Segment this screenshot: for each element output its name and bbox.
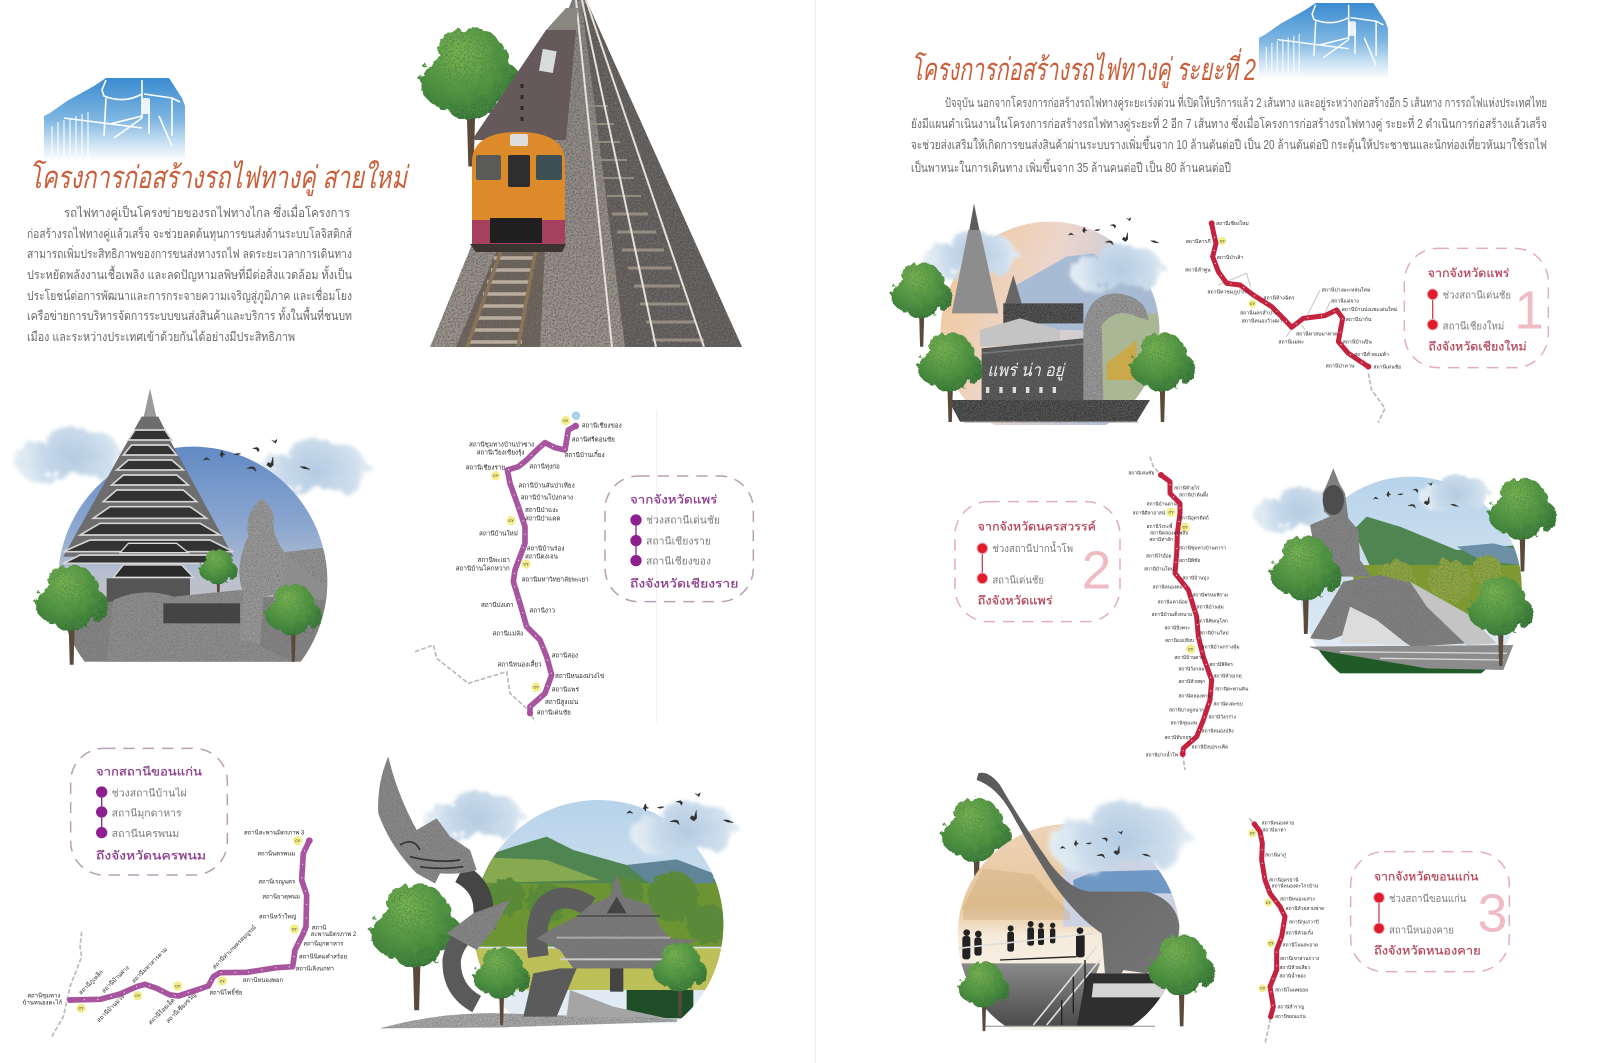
route map: Pak Nam Pho to Den Chai: สถานีวังกร่าง	[1208, 714, 1237, 721]
route map: Den Chai to Chiang Khong: สถานีป่าแงะ	[525, 506, 559, 514]
route map: Ban Phai to Nakhon Phanom: บ้านหนองตะไก้	[23, 999, 63, 1007]
route map: Pak Nam Pho to Den Chai: สถานีแม่เทียบ	[1165, 637, 1194, 644]
route map: Pak Nam Pho to Den Chai: สถานีหนองปลิง	[1202, 728, 1234, 735]
route map: Den Chai to Chiang Khong: CY	[508, 519, 514, 523]
route map: Ban Phai to Nakhon Phanom: สถานีภูเหล็ก	[76, 967, 105, 996]
route map: Pak Nam Pho to Den Chai: สถานีบ้านกร่างคุ้ม	[1202, 644, 1240, 651]
route map: Khon Kaen to Nong Khai: CY	[1260, 987, 1266, 991]
route map: Ban Phai to Nakhon Phanom: สถานีหว้าใหญ่	[259, 913, 296, 921]
route map: Khon Kaen to Nong Khai: สถานีกุมภวาปี	[1289, 918, 1319, 925]
legend 2: Nakhon Sawan to Phrae: ช่วงสถานีปากน้ำโพ	[992, 541, 1073, 555]
route map: Khon Kaen to Nong Khai: สถานีโนนพยอม	[1275, 986, 1308, 993]
route map: Pak Nam Pho to Den Chai: CY	[1188, 647, 1194, 651]
route map: Pak Nam Pho to Den Chai: สถานีห้วยเกตุ	[1213, 673, 1242, 680]
route map: Khon Kaen to Nong Khai: สถานีห้วยสามพาด	[1286, 905, 1324, 912]
route map: Pak Nam Pho to Den Chai	[1128, 457, 1249, 770]
text block: intro left: เครือข่ายการบริหารจัดการระบบขนส่งสินค้าและบริการ ทั้งในพื้นที่ชนบท	[27, 306, 352, 323]
text block: phase 2 intro: เป็นพาหนะในการเดินทาง เพิ่มขึ้นจาก 35 ล้านคนต่อปี เป็น 80 ล้านคนต่อปี	[911, 158, 1231, 175]
route map: Ban Phai to Nakhon Phanom: สถานีธาตุพนม	[262, 893, 300, 901]
route map: Den Chai to Chiang Khong: สถานีปงเตา	[481, 601, 514, 609]
route map: Ban Phai to Nakhon Phanom: สถานีโพธิ์ชัย	[209, 987, 242, 996]
legend: Phrae to Chiang Rai: สถานีเชียงราย	[646, 535, 711, 547]
route map: Pak Nam Pho to Den Chai: สถานีพิจิตร	[1209, 661, 1233, 668]
route map: Pak Nam Pho to Den Chai: สถานีห้วยพุก	[1178, 678, 1205, 685]
route map: Pak Nam Pho to Den Chai: สถานีวังกลม	[1178, 666, 1204, 673]
legend 3: Khon Kaen to Nong Khai: 3	[1478, 885, 1507, 944]
legend 3: Khon Kaen to Nong Khai: ช่วงสถานีขอนแก่น	[1389, 893, 1466, 905]
route map: Pak Nam Pho to Den Chai: สถานีห้วยไร่	[1174, 485, 1200, 492]
legend 3: Khon Kaen to Nong Khai	[1351, 852, 1509, 972]
legend: Phrae to Chiang Rai: สถานีเชียงของ	[646, 556, 711, 568]
route map: Pak Nam Pho to Den Chai: สถานีปากน้ำโพ	[1146, 750, 1178, 758]
picture: Phrae stupa and city wall	[891, 203, 1195, 425]
route map: Pak Nam Pho to Den Chai: สถานีบ้านสุม	[1197, 604, 1224, 611]
route map: Den Chai to Chiang Khong: CY	[493, 474, 499, 478]
route map: Pak Nam Pho to Den Chai: สถานีวังกะพี้	[1147, 522, 1173, 530]
route map: Pak Nam Pho to Den Chai: สถานีดงตะขบ	[1213, 700, 1243, 707]
route map: Den Chai to Chiang Khong: สถานีสูงเม่น	[545, 698, 579, 706]
route map: Den Chai to Chiang Khong: สถานีหนองม่วงไข่	[555, 672, 604, 680]
route map: Den Chai to Chiang Mai: สถานีหนองวัวเฒ่า	[1242, 317, 1282, 324]
picture: Phrae stupa and city wall: แพร่ น่า อยู่	[987, 360, 1066, 381]
route map: Pak Nam Pho to Den Chai: สถานีตะพานหิน	[1215, 685, 1249, 692]
route map: Den Chai to Chiang Mai: สถานีทาชมภูปากา	[1207, 289, 1249, 296]
route map: Ban Phai to Nakhon Phanom: CY	[175, 984, 181, 988]
route map: Den Chai to Chiang Khong: สถานีเด่นชัย	[537, 709, 571, 717]
route map: Den Chai to Chiang Mai: สถานีนาก้น	[1346, 316, 1372, 323]
route map: Khon Kaen to Nong Khai: CY	[1250, 832, 1255, 836]
legend 2: Nakhon Sawan to Phrae: สถานีเด่นชัย	[992, 575, 1044, 587]
legend 1: Phrae to Chiang Mai: จากจังหวัดแพร่	[1428, 267, 1509, 280]
legend: Khon Kaen to Nakhon Phanom: ถึงจังหวัดนครพนม	[96, 849, 206, 862]
route map: Ban Phai to Nakhon Phanom: สถานีนครพนม	[257, 850, 295, 858]
route map: Pak Nam Pho to Den Chai: สถานีบ้านใหม่	[1199, 630, 1229, 637]
route map: Khon Kaen to Nong Khai: สถานีหนองคาย	[1262, 820, 1294, 827]
legend 3: Khon Kaen to Nong Khai: ถึงจังหวัดหนองคาย	[1374, 945, 1481, 958]
text block: intro left	[27, 204, 352, 344]
route map: Khon Kaen to Nong Khai: สถานีนาทา	[1262, 827, 1286, 834]
legend: Khon Kaen to Nakhon Phanom: ช่วงสถานีบ้านไผ่	[112, 787, 187, 799]
legend: Khon Kaen to Nakhon Phanom: สถานีนครพนม	[112, 828, 179, 840]
route map: Pak Nam Pho to Den Chai: CY	[1182, 526, 1188, 530]
route map: Den Chai to Chiang Mai: CY	[1220, 239, 1225, 243]
route map: Pak Nam Pho to Den Chai: สถานีคลองมะพลับ	[1150, 530, 1188, 537]
legend 2: Nakhon Sawan to Phrae: ถึงจังหวัดแพร่	[978, 595, 1053, 608]
route map: Pak Nam Pho to Den Chai: สถานีแควน้อย	[1158, 599, 1188, 606]
route map: Pak Nam Pho to Den Chai: สถานีเด่นชัย	[1128, 470, 1155, 477]
legend: Phrae to Chiang Rai: จากจังหวัดแพร่	[630, 493, 717, 506]
route map: Den Chai to Chiang Mai: CY	[1250, 302, 1255, 306]
route map: Khon Kaen to Nong Khai: สถานีหนองตะไกรบ้าน	[1272, 882, 1319, 889]
route map: Ban Phai to Nakhon Phanom: สถานีมุกดาหาร	[303, 939, 344, 947]
route map: Khon Kaen to Nong Khai: สถานีอุดรธานี	[1269, 876, 1299, 883]
route map: Den Chai to Chiang Khong: สถานีบ้านร่อง	[527, 544, 564, 552]
legend: Phrae to Chiang Rai	[605, 476, 753, 602]
route map: Khon Kaen to Nong Khai: สถานีน้ำพอง	[1279, 971, 1306, 979]
route map: Ban Phai to Nakhon Phanom: CY	[295, 839, 301, 843]
route map: Pak Nam Pho to Den Chai: สถานีพิษณุโลก	[1197, 618, 1228, 625]
route map: Pak Nam Pho to Den Chai: สถานีบ้านโคน	[1144, 565, 1175, 572]
picture: naga gate and green mountains	[371, 757, 736, 1028]
route map: Ban Phai to Nakhon Phanom: สถานีชุมทาง	[27, 992, 60, 1000]
route map: Den Chai to Chiang Mai: สถานีป่าเส้า	[1217, 254, 1243, 261]
route map: Khon Kaen to Nong Khai: สถานีนาภู่	[1265, 852, 1286, 859]
legend: Khon Kaen to Nakhon Phanom: จากสถานีขอนแก่น	[96, 766, 202, 779]
picture: Buddha statue and green mountains	[1255, 468, 1556, 673]
route map: Ban Phai to Nakhon Phanom: CY	[292, 927, 297, 931]
route map: Den Chai to Chiang Khong: สถานีทุ่งก่อ	[529, 462, 560, 470]
route map: Khon Kaen to Nong Khai: สถานีขอนแก่น	[1275, 1013, 1306, 1020]
route map: Den Chai to Chiang Mai: สถานีแม่ทะ	[1278, 338, 1304, 345]
legend 3: Khon Kaen to Nong Khai: จากจังหวัดขอนแก่น	[1374, 870, 1478, 883]
route map: Ban Phai to Nakhon Phanom: สถานีมหาสารคาม	[130, 945, 169, 985]
route map: Den Chai to Chiang Mai: สถานีสารภี	[1186, 238, 1211, 245]
legend 3: Khon Kaen to Nong Khai: สถานีหนองคาย	[1389, 925, 1454, 937]
route map: Pak Nam Pho to Den Chai: สถานีทับกฤช	[1164, 734, 1192, 741]
route map: Pak Nam Pho to Den Chai: สถานีบางมูลนาก	[1169, 706, 1204, 713]
route map: Den Chai to Chiang Khong: สถานีเวียงเชียงรุ้ง	[477, 448, 525, 456]
route map: Pak Nam Pho to Den Chai: สถานีพรหมพิราม	[1192, 591, 1228, 598]
route map: Ban Phai to Nakhon Phanom: CY	[78, 1007, 84, 1011]
picture: dinosaur and viewing walkway	[942, 773, 1215, 1031]
route map: Pak Nam Pho to Den Chai: สถานีไร่อ้อย	[1146, 553, 1172, 560]
route map: Den Chai to Chiang Khong: CY	[533, 686, 539, 690]
route map: Khon Kaen to Nong Khai: CY	[1268, 942, 1274, 946]
route map: Den Chai to Chiang Khong: สถานีงาว	[529, 607, 556, 615]
route map: Pak Nam Pho to Den Chai: สถานีพิชัย	[1179, 557, 1200, 564]
picture: train on double track	[421, 0, 742, 347]
route map: Pak Nam Pho to Den Chai: สถานีศิลาอาสน์	[1133, 510, 1166, 517]
route map: Den Chai to Chiang Khong: สถานีหนองเสี้ยว	[497, 659, 542, 668]
legend: Phrae to Chiang Rai: ช่วงสถานีเด่นชัย	[646, 515, 720, 527]
legend: Khon Kaen to Nakhon Phanom	[71, 748, 227, 875]
route map: Den Chai to Chiang Mai: สถานีนครลำปาง	[1240, 309, 1278, 316]
route map: Khon Kaen to Nong Khai: สถานีสำราญ	[1277, 1004, 1304, 1011]
route map: Pak Nam Pho to Den Chai: สถานีท่าสัก	[1149, 536, 1173, 543]
route map: Pak Nam Pho to Den Chai: สถานีบึงบอระเพ็ด	[1192, 743, 1228, 751]
route map: Den Chai to Chiang Khong	[415, 410, 657, 723]
text block: intro left: สามารถเพิ่มประสิทธิภาพของการขนส่งทางรถไฟ ลดระยะเวลาการเดินทาง	[27, 245, 352, 261]
route map: Pak Nam Pho to Den Chai: สถานีบึงพระ	[1164, 624, 1190, 631]
route map: Den Chai to Chiang Mai: สถานีเด่นชัย	[1373, 363, 1401, 370]
route map: Den Chai to Chiang Khong: สถานีเชียงของ	[582, 421, 622, 429]
route map: Ban Phai to Nakhon Phanom: สถานีเชียงขวัญ	[164, 991, 198, 1025]
route map: Den Chai to Chiang Khong: สถานีบ้านโคกหวาก	[456, 564, 510, 572]
text block: intro left: ประโยชน์ต่อการพัฒนาและการกระจายความเจริญสู่ภูมิภาค และเชื่อมโยง	[27, 287, 352, 304]
route map: Den Chai to Chiang Mai: สถานีป่าคาน	[1326, 363, 1355, 370]
route map: Khon Kaen to Nong Khai: สถานีโนนสะอาด	[1283, 941, 1318, 948]
legend: Khon Kaen to Nakhon Phanom: สถานีมุกดาหาร	[112, 807, 182, 819]
legend 1: Phrae to Chiang Mai: สถานีเชียงใหม่	[1443, 321, 1504, 333]
route map: Den Chai to Chiang Khong: สถานีชุมทางบ้านป่าซาง	[469, 440, 534, 448]
title: new line project: โครงการก่อสร้างรถไฟทางคู่ สายใหม่	[29, 160, 410, 197]
legend 2: Nakhon Sawan to Phrae	[955, 502, 1120, 622]
route map: Den Chai to Chiang Mai: สถานีห้างฉัตร	[1263, 295, 1295, 302]
route map: Pak Nam Pho to Den Chai: CY	[1168, 511, 1174, 515]
route map: Ban Phai to Nakhon Phanom: CY	[135, 994, 141, 998]
route map: Den Chai to Chiang Khong: สถานีบ้านใหม่	[479, 529, 518, 537]
legend 1: Phrae to Chiang Mai: ช่วงสถานีเด่นชัย	[1443, 289, 1511, 301]
text block: intro left: ประหยัดพลังงานเชื้อเพลิง และลดปัญหามลพิษที่มีต่อสิ่งแวดล้อม ทั้งเป็น	[27, 265, 352, 282]
route map: Pak Nam Pho to Den Chai: สถานีบ้านตาล	[1174, 654, 1204, 661]
legend: Phrae to Chiang Rai: ถึงจังหวัดเชียงราย	[630, 577, 738, 590]
route map: Den Chai to Chiang Khong: สถานีศรีดอนชัย	[572, 436, 615, 444]
route map: Den Chai to Chiang Mai: สถานีปางมะเหล่นใหม่	[1322, 287, 1370, 294]
route map: Ban Phai to Nakhon Phanom: สถานีหนองพอก	[243, 976, 283, 984]
route map: Ban Phai to Nakhon Phanom: สถานีนิคมคำสร้อย	[299, 953, 347, 961]
icon: locomotive left	[44, 78, 185, 161]
route map: Den Chai to Chiang Khong: สถานีแม่ลัง	[492, 629, 523, 637]
route map: Ban Phai to Nakhon Phanom: สถานีร้อยเอ็ด	[146, 996, 177, 1026]
route map: Den Chai to Chiang Mai: สถานีลำพูน	[1185, 267, 1211, 274]
route map: Khon Kaen to Nong Khai: สถานีเขาสวนกวาง	[1280, 955, 1320, 962]
route map: Den Chai to Chiang Mai: สถานีห้วยแม่ต้า	[1354, 351, 1389, 358]
route map: Den Chai to Chiang Khong: CY	[523, 562, 529, 566]
route map: Den Chai to Chiang Khong: สถานีสอง	[552, 651, 578, 659]
route map: Pak Nam Pho to Den Chai: สถานีชุมแสง	[1171, 720, 1198, 727]
route map: Khon Kaen to Nong Khai: สถานีห้วยเกิ้ง	[1286, 929, 1314, 937]
route map: Den Chai to Chiang Khong: สถานีมหาวิทยาลัยพะเยา	[522, 575, 589, 583]
route map: Ban Phai to Nakhon Phanom: CY	[220, 979, 225, 983]
route map: Den Chai to Chiang Khong: สถานีป่าแดด	[525, 515, 560, 523]
route map: Ban Phai to Nakhon Phanom: สถานีเลิงนกทา	[296, 965, 334, 973]
route map: Den Chai to Chiang Mai: สถานีบ้านปิน	[1343, 338, 1372, 345]
text block: intro left: รถไฟทางคู่เป็นโครงข่ายของรถไฟทางไกล ซึ่งเมื่อโครงการ	[64, 204, 350, 221]
route map: Den Chai to Chiang Khong: สถานีเชียงราย	[466, 463, 505, 471]
legend 1: Phrae to Chiang Mai	[1404, 248, 1548, 368]
legend 1: Phrae to Chiang Mai: ถึงจังหวัดเชียงใหม่	[1428, 339, 1527, 353]
route map: Pak Nam Pho to Den Chai: สถานีบ้านด่าน	[1147, 500, 1177, 507]
route map: Ban Phai to Nakhon Phanom: สะพานมิตรภาพ 2	[311, 931, 357, 938]
route map: Den Chai to Chiang Mai: สถานีแม่จาง	[1331, 297, 1359, 304]
route map: Pak Nam Pho to Den Chai: สถานีบ้านเต็งหนาม	[1152, 610, 1192, 618]
text block: intro left: ก่อสร้างรถไฟทางคู่แล้วเสร็จ จะช่วยลดต้นทุนการขนส่งด้านระบบโลจิสติกส์	[27, 226, 352, 242]
route map: Pak Nam Pho to Den Chai: สถานีอุตรดิตถ์	[1179, 515, 1209, 522]
route map: Den Chai to Chiang Khong: สถานีพะเยา	[477, 556, 510, 564]
route map: Den Chai to Chiang Khong: สถานีบ้านสันป่าเหียง	[518, 482, 575, 490]
text block: intro left: เมือง และระหว่างประเทศเข้าด้วยกันได้อย่างมีประสิทธิภาพ	[27, 330, 295, 344]
route map: Den Chai to Chiang Mai: สถานีทาสบมาทาด	[1296, 331, 1337, 338]
route map: Ban Phai to Nakhon Phanom: สถานีสะพานมิตรภาพ 3	[244, 829, 305, 837]
route map: Ban Phai to Nakhon Phanom	[23, 829, 357, 1037]
route map: Ban Phai to Nakhon Phanom: สถานี	[312, 923, 326, 931]
route map: Khon Kaen to Nong Khai	[1248, 818, 1324, 1043]
route map: Pak Nam Pho to Den Chai: สถานีบ้านบุ่ง	[1182, 575, 1209, 582]
route map: Khon Kaen to Nong Khai: สถานีหนองแสวง	[1280, 896, 1315, 903]
route map: Pak Nam Pho to Den Chai: สถานีป่าต้นผึ้ง	[1179, 490, 1209, 498]
legend 2: Nakhon Sawan to Phrae: จากจังหวัดนครสวรรค์	[978, 520, 1096, 534]
route map: Ban Phai to Nakhon Phanom: สถานีบ้านฝาง	[100, 964, 131, 995]
route map: Den Chai to Chiang Mai: สถานีเชียงใหม่	[1216, 220, 1249, 227]
legend 1: Phrae to Chiang Mai: 1	[1514, 281, 1544, 340]
route map: Khon Kaen to Nong Khai: สถานีห้วยเสียว	[1279, 964, 1310, 971]
route map: Den Chai to Chiang Khong: สถานีบ้านโป่งกลาง	[521, 493, 573, 501]
route map: Den Chai to Chiang Khong: สถานีดงเจน	[525, 552, 559, 560]
route map: Ban Phai to Nakhon Phanom: สถานีบ้านม่วง	[95, 993, 126, 1024]
route map: Ban Phai to Nakhon Phanom: สถานีเรณูนคร	[258, 877, 296, 885]
route map: Pak Nam Pho to Den Chai: สถานีคลองพาน	[1178, 693, 1212, 700]
route map: Den Chai to Chiang Khong: CY	[563, 419, 569, 423]
route map: Den Chai to Chiang Khong: สถานีแพร่	[552, 686, 579, 694]
route map: Pak Nam Pho to Den Chai: สถานีชุมทางบ้านดารา	[1179, 545, 1226, 552]
route map: Den Chai to Chiang Khong: สถานีบ้านเกี๋ยง	[564, 450, 605, 459]
text block: phase 2 intro	[911, 94, 1547, 175]
route map: Khon Kaen to Nong Khai: CY	[1266, 901, 1271, 905]
legend 2: Nakhon Sawan to Phrae: 2	[1082, 541, 1111, 600]
picture: Chiang Rai pagoda and naga	[16, 388, 369, 665]
route map: Den Chai to Chiang Mai	[1185, 220, 1401, 423]
icon: locomotive right	[1259, 3, 1388, 79]
title: phase 2 project: โครงการก่อสร้างรถไฟทางคู่ ระยะที่ 2	[911, 48, 1256, 89]
route map: Den Chai to Chiang Mai: สถานีบ้านปงแพะเด่นใหม่	[1342, 306, 1397, 313]
route map: Pak Nam Pho to Den Chai: สถานีหนองตม	[1153, 584, 1183, 591]
route map: Ban Phai to Nakhon Phanom: สถานีท่าเกษตรสมบูรณ์	[210, 923, 258, 971]
